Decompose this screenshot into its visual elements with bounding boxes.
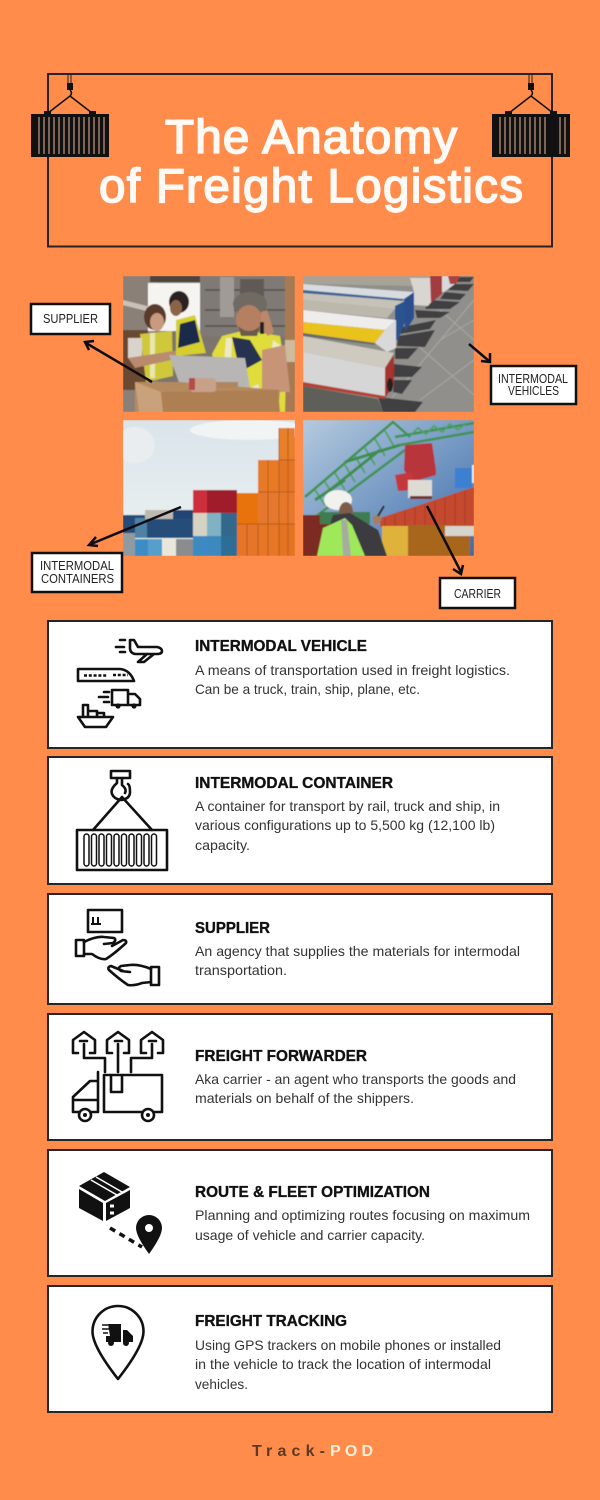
- panel: supplier: SUPPLIER: [195, 920, 270, 937]
- panel: freight forwarder: [48, 1014, 552, 1140]
- arrow: intermodal containers: [89, 507, 181, 546]
- panel: route and fleet optimization: usage of vehicle and carrier capacity.: [195, 1227, 425, 1243]
- arrow: intermodal vehicles: [469, 344, 490, 362]
- label: intermodal containers: CONTAINERS: [41, 572, 114, 586]
- panel: intermodal container: [48, 757, 552, 884]
- panel: supplier: transportation.: [195, 962, 287, 978]
- panel: route and fleet optimization: ROUTE & FLEET OPTIMIZATION: [195, 1184, 430, 1201]
- icon: parcel route to map pin: [79, 1172, 162, 1254]
- panel: intermodal container: various configurations up to 5,500 kg (12,100 lb): [195, 817, 495, 833]
- panel: freight forwarder: materials on behalf of the shippers.: [195, 1090, 414, 1106]
- panel: freight tracking: in the vehicle to track the location of intermodal: [195, 1356, 491, 1372]
- label: carrier: CARRIER: [454, 587, 501, 601]
- arrow: carrier: [427, 506, 463, 574]
- panel: freight tracking: vehicles.: [195, 1376, 248, 1392]
- title: The Anatomy: [165, 111, 457, 164]
- label: intermodal containers: INTERMODAL: [40, 559, 114, 573]
- label: supplier: [31, 304, 110, 334]
- label: intermodal vehicles: INTERMODAL: [498, 372, 568, 386]
- icon: crane hook and container: [77, 771, 167, 870]
- panel: supplier: An agency that supplies the materials for intermodal: [195, 943, 520, 959]
- panel: intermodal container: capacity.: [195, 837, 250, 853]
- label: intermodal containers: [32, 553, 122, 592]
- arrow: supplier: [85, 341, 152, 382]
- icon: pin with delivery truck: [92, 1306, 144, 1379]
- footer logo: [252, 1443, 373, 1460]
- label: carrier: [440, 578, 515, 608]
- panel: freight tracking: [48, 1286, 552, 1412]
- panel: route and fleet optimization: [48, 1150, 552, 1276]
- panel: freight forwarder: Aka carrier - an agent who transports the goods and: [195, 1071, 516, 1087]
- panel: intermodal container: A container for transport by rail, truck and ship, in: [195, 798, 500, 814]
- panel: intermodal vehicle: Can be a truck, train, ship, plane, etc.: [195, 681, 420, 697]
- photo: warehouse workers with laptop: [122, 276, 295, 412]
- photo: parked freight trailers: [303, 276, 474, 412]
- footer logo: Track-: [252, 1443, 325, 1460]
- title frame: [48, 74, 552, 246]
- icon: plane train truck ship: [78, 640, 162, 727]
- icon: truck with three destination houses: [73, 1032, 163, 1121]
- label: intermodal vehicles: [491, 366, 576, 404]
- title: of Freight Logistics: [99, 160, 523, 213]
- label: intermodal vehicles: VEHICLES: [508, 384, 559, 398]
- footer logo: POD: [330, 1443, 373, 1460]
- icon: hands exchanging a box: [76, 910, 159, 985]
- icon: left hanging container: [31, 74, 109, 157]
- panel: supplier: [48, 894, 552, 1004]
- panel: route and fleet optimization: Planning and optimizing routes focusing on maximum: [195, 1207, 530, 1223]
- photo: carrier worker under crane: [303, 420, 474, 556]
- panel: intermodal vehicle: INTERMODAL VEHICLE: [195, 638, 367, 655]
- title: [99, 111, 523, 213]
- panel: intermodal vehicle: A means of transportation used in freight logistics.: [195, 662, 510, 678]
- panel: freight tracking: Using GPS trackers on mobile phones or installed: [195, 1337, 501, 1353]
- photo: stacked shipping containers: [123, 420, 295, 556]
- panel: freight tracking: FREIGHT TRACKING: [195, 1313, 347, 1330]
- panel: intermodal vehicle: [48, 621, 552, 748]
- panel: freight forwarder: FREIGHT FORWARDER: [195, 1048, 367, 1065]
- icon: right hanging container: [492, 74, 570, 157]
- label: supplier: SUPPLIER: [43, 312, 98, 326]
- panel: intermodal container: INTERMODAL CONTAINER: [195, 775, 393, 792]
